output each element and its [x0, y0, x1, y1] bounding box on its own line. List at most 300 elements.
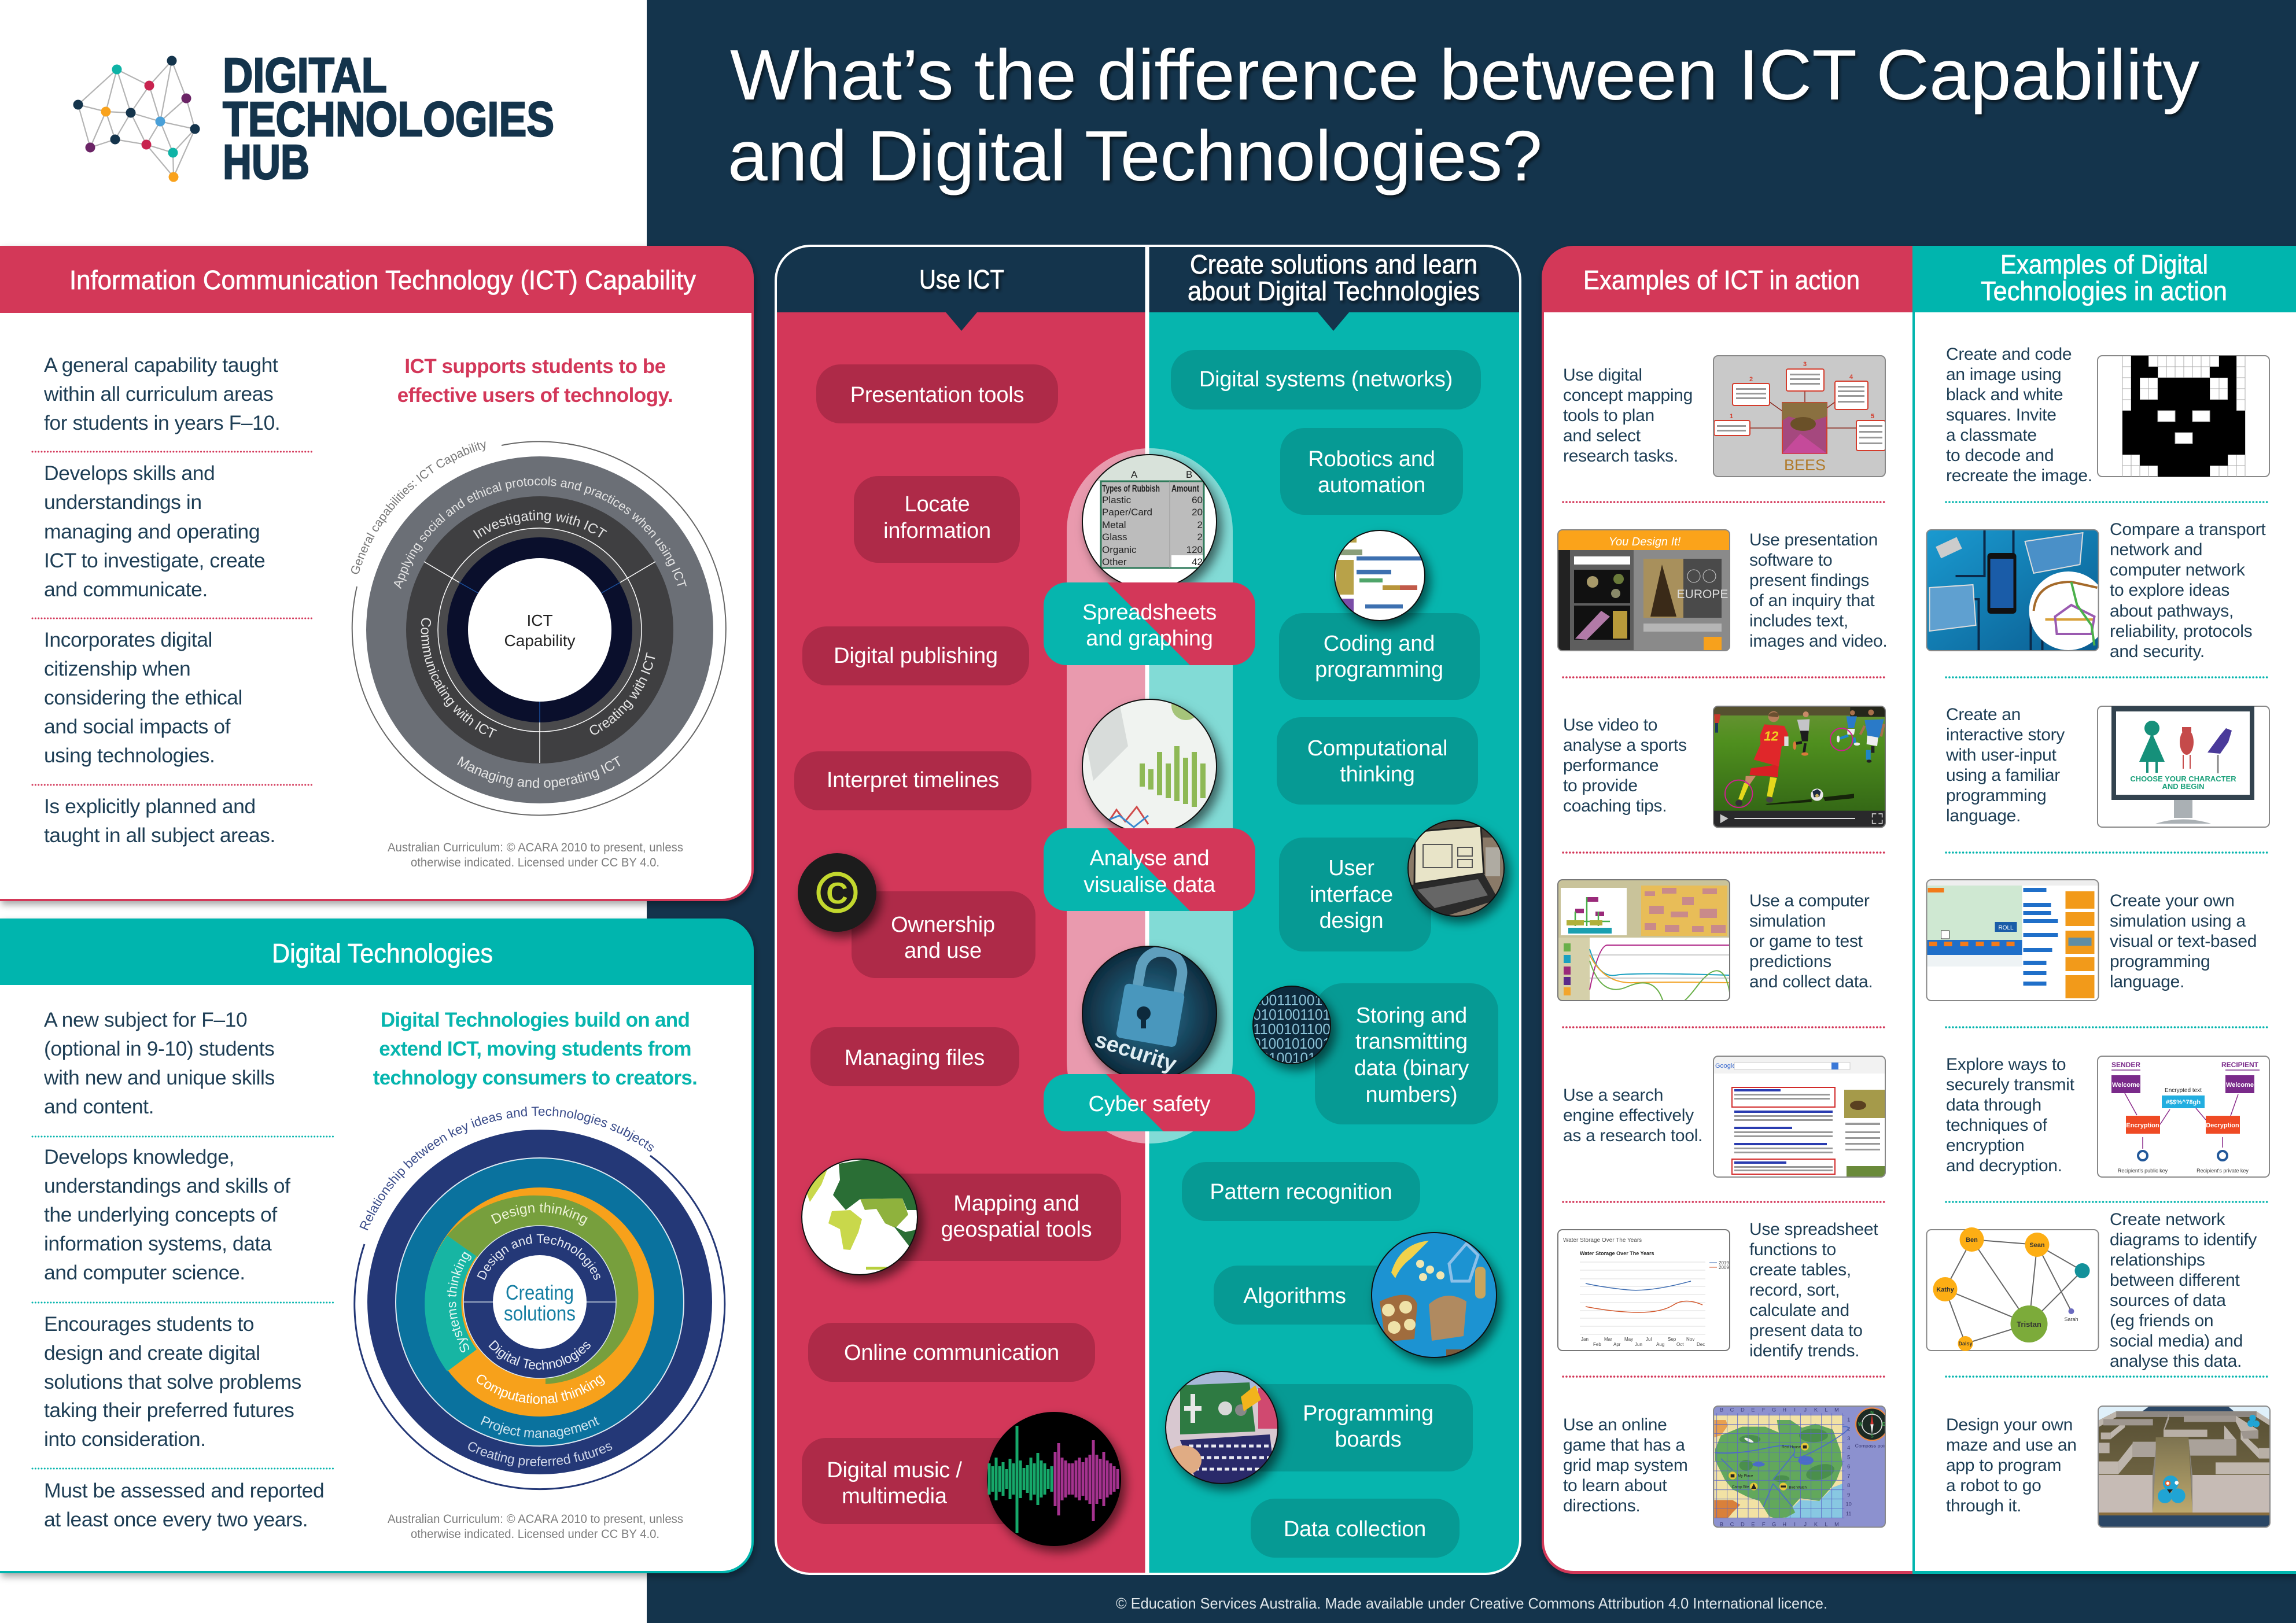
description points: Incorporates digital [44, 628, 212, 651]
text: grid map game: Use an online [1563, 1415, 1667, 1434]
image: water storage line chart: Apr [1613, 1342, 1621, 1347]
text: interactive story: language. [1946, 806, 2021, 825]
image: bee concept map: 1 [1730, 413, 1733, 420]
image: water storage line chart: Dec [1697, 1342, 1705, 1347]
pill: Coding and programming [1279, 613, 1480, 700]
text: own simulation [2110, 891, 2257, 991]
text: transport network: network and [2110, 540, 2202, 559]
image: water storage line chart: Jun [1635, 1342, 1642, 1347]
text: encryption [1946, 1055, 2075, 1175]
image: visual programming environment: ROLL [1998, 925, 2014, 931]
description points: Develops knowledge, [44, 1145, 234, 1168]
image: spreadsheet: Organic [1102, 544, 1137, 555]
image: grid map: 11 [1846, 1511, 1852, 1517]
text: encryption: securely transmit [1946, 1075, 2075, 1094]
text: grid map game: game that has a [1563, 1436, 1685, 1455]
chart: Digital Technologies rings [355, 1104, 725, 1489]
text: search engine: Use a search [1563, 1086, 1663, 1105]
image: grid map: Compass point [1855, 1443, 1889, 1448]
pill: Programming boards: Programming [1303, 1401, 1433, 1426]
image: grid map: F [1762, 1521, 1766, 1527]
heading: Create solutions [1188, 249, 1480, 306]
text: presentation software: Use presentation [1749, 530, 1878, 549]
teal statement: technology consumers to creators. [373, 1067, 697, 1089]
image: world map [802, 1159, 920, 1275]
image: presentation design tool: You Design It! [1609, 536, 1681, 548]
pill: Programming boards [1238, 1384, 1473, 1471]
image: monitor with characters: AND BEGIN [2162, 782, 2204, 791]
image: grid map: 10 [1845, 1502, 1852, 1507]
text: network diagrams [2110, 1210, 2257, 1371]
pill: Storing and transmitting data: transmitting [1355, 1030, 1468, 1054]
image: grid map: B [1720, 1407, 1723, 1413]
description points: information systems, data [44, 1232, 272, 1255]
pill: Pattern recognition [1182, 1162, 1420, 1221]
image: grid map: E [1751, 1407, 1755, 1413]
icon: copyright [798, 853, 876, 932]
teal statement: Digital Technologies build on and [381, 1009, 690, 1031]
pill: Ownership and use [852, 891, 1035, 978]
text: grid map game [1563, 1415, 1688, 1515]
image: grid map: D [1741, 1407, 1745, 1413]
text: search engine: engine effectively [1563, 1106, 1694, 1125]
panel background [0, 919, 754, 1573]
image: grid map: Rest House [1782, 1445, 1801, 1449]
description points: taking their preferred futures [44, 1399, 294, 1422]
text: transport network: and security. [2110, 642, 2205, 661]
image: grid map: F [1762, 1407, 1766, 1413]
image: grid map: C [1730, 1407, 1734, 1413]
pill: Mapping and geospatial tools: geospatial tools [941, 1218, 1092, 1242]
title: What’s the difference between ICT Capability [730, 36, 2200, 115]
description points: and communicate. [44, 578, 208, 601]
description points: Develops skills and [44, 462, 215, 485]
logo network icon [73, 56, 200, 182]
image: grid map: C [1730, 1521, 1734, 1527]
image: grid map: N [1870, 1410, 1874, 1415]
text: concept mapping [1563, 366, 1693, 466]
example row dividers [1563, 502, 2269, 1377]
text: encryption: techniques of [1946, 1116, 2048, 1135]
text: spreadsheet functions: identify trends. [1749, 1341, 1859, 1360]
text: network diagrams: analyse this data. [2110, 1352, 2242, 1371]
image: spreadsheet: Other [1102, 556, 1127, 567]
image: security padlock: security [1092, 1028, 1180, 1077]
panel: Digital Technologies [0, 919, 754, 1573]
text: spreadsheet functions: calculate and [1749, 1301, 1849, 1320]
image: grid map: E [1882, 1422, 1886, 1427]
text: interactive story: with user-input [1945, 746, 2057, 765]
image: water storage line chart: Sep [1668, 1337, 1676, 1342]
text: sports video [1563, 715, 1687, 816]
panel: Use ICT / Create solutions [776, 246, 1520, 1574]
image: water storage line chart: Feb [1593, 1342, 1601, 1347]
image: spreadsheet: Types of Rubbish [1102, 483, 1160, 494]
image: social network diagram: Ben [1966, 1237, 1978, 1244]
caption: otherwise indicated. Licensed under CC BY 4.0. [411, 1528, 659, 1541]
pill: User interface design: User [1328, 856, 1374, 880]
image: grid map: 3 [1847, 1436, 1850, 1441]
pill: Cyber safety: Cyber safety [1089, 1092, 1211, 1116]
text: encryption: Explore ways to [1946, 1055, 2066, 1074]
image: grid map: D [1741, 1521, 1745, 1527]
pill: Online communication: Online communication [844, 1341, 1059, 1365]
text: grid map game: to learn about [1563, 1476, 1667, 1495]
image: grid map: H [1782, 1521, 1786, 1527]
chart: ICT capability rings: Creating with ICT [590, 652, 655, 735]
image: grid map: K [1814, 1521, 1818, 1527]
logo wordmark [223, 48, 554, 189]
heading: Examples of Digital Technologies: Technologies in action [1981, 276, 2227, 306]
pill: Data collection: Data collection [1284, 1517, 1426, 1541]
chart: Digital Technologies rings: Digital Technologies [486, 1337, 594, 1373]
image: bee concept map: 5 [1871, 413, 1874, 420]
pill: Digital publishing: Digital publishing [834, 644, 998, 668]
description points: A new subject for F–10 [44, 1008, 247, 1031]
image: bee concept map: 4 [1849, 374, 1853, 381]
image: grid map: My Place [1738, 1474, 1753, 1478]
image: simulation [1558, 880, 1730, 1008]
panel: ICT Capability [0, 246, 754, 901]
image: water storage line chart: Nov [1686, 1337, 1694, 1342]
text: interactive story: using a familiar [1946, 766, 2060, 785]
image: water storage line chart: Water Storage Over The Years [1580, 1251, 1654, 1256]
red statement: ICT supports students to be [404, 355, 666, 378]
white left margin [0, 0, 647, 1623]
pill: Computational thinking: thinking [1340, 762, 1415, 787]
heading: Examples of Digital Technologies [1981, 249, 2227, 306]
description points: understandings and skills of [44, 1174, 290, 1197]
chart: Digital Technologies rings: Systems thinking [444, 1248, 473, 1356]
pill: Spreadsheets and graphing [1044, 582, 1255, 665]
pill: Digital systems [1171, 350, 1481, 410]
panel colour fields [776, 246, 1520, 1574]
panel heading: Digital Technologies [272, 938, 493, 968]
image: charts [1082, 691, 1217, 834]
image: spreadsheet: 60 [1192, 495, 1203, 506]
text: computer simulation: Use a computer [1749, 891, 1870, 910]
text: spreadsheet functions: functions to [1749, 1240, 1836, 1259]
text: network diagrams: sources of data [2110, 1291, 2226, 1310]
text: presentation software: images and video. [1749, 632, 1887, 651]
chart: ICT capability rings: ICT [526, 611, 553, 629]
caption [388, 1513, 683, 1541]
chart: ICT capability rings: Capability [504, 632, 575, 650]
heading: Create solutions: about Digital Technologies [1188, 276, 1480, 306]
image: binary digits: 0100101001 [1253, 1035, 1331, 1052]
text: code an image: to decode and [1946, 446, 2054, 465]
image: grid map: Bird Watch [1789, 1485, 1807, 1489]
image: monitor with characters: CHOOSE YOUR CHARACTER [2130, 774, 2236, 783]
image: binary digits: 0101001101 [1253, 1006, 1331, 1023]
description points: and computer science. [44, 1261, 245, 1284]
text: code an image: black and white [1946, 385, 2063, 404]
text: code an image: Create and code [1946, 345, 2072, 364]
chart: Digital Technologies rings: Computational thinking [473, 1371, 607, 1407]
image: spreadsheet: 42 [1192, 556, 1203, 567]
text: spreadsheet functions: present data to [1749, 1321, 1863, 1340]
description points: (optional in 9-10) students [44, 1037, 274, 1060]
image: spreadsheet: B [1186, 469, 1192, 480]
image: bee concept map: 2 [1749, 376, 1753, 383]
image: encryption diagram: RECIPIENT [2221, 1061, 2259, 1069]
text: interactive story: interactive story [1946, 725, 2065, 744]
text: robot maze: maze and use an [1946, 1436, 2077, 1455]
text: network diagrams: diagrams to identify [2110, 1230, 2257, 1249]
image: grid map: 1 [1847, 1417, 1850, 1422]
image: encryption diagram: Welcome [2226, 1082, 2254, 1089]
image: encryption diagram: Recipient's public key [2118, 1168, 2168, 1174]
pill: Analyse and visualise data [1044, 828, 1255, 911]
image: grid map: M [1834, 1407, 1839, 1413]
title [728, 36, 2200, 196]
image: grid map: S [1870, 1434, 1874, 1439]
text: transport network: reliability, protocols [2110, 622, 2252, 641]
text: presentation software: includes text, [1749, 611, 1848, 630]
image: audio waveform [987, 1412, 1121, 1546]
pill: Programming boards: boards [1335, 1427, 1401, 1452]
text: code an image [1946, 345, 2092, 485]
image: presentation design tool [1558, 530, 1730, 651]
pill: Data collection [1251, 1499, 1460, 1558]
text: network diagrams: (eg friends on [2110, 1311, 2213, 1330]
description points: Is explicitly planned and [44, 795, 256, 818]
text: concept mapping: research tasks. [1563, 447, 1678, 466]
image: grid map: L [1825, 1521, 1828, 1527]
pill: User interface design [1279, 838, 1431, 951]
chart: Digital Technologies rings: Design and Technologies [474, 1231, 606, 1282]
pill: Spreadsheets and graphing: and graphing [1086, 626, 1213, 651]
text: computer simulation [1749, 891, 1873, 991]
caption [388, 841, 683, 869]
title: and Digital Technologies? [728, 117, 1542, 196]
arrow: Create solutions [1318, 312, 1349, 331]
text: computer simulation: or game to test [1749, 932, 1863, 951]
image: encryption diagram: Welcome [2112, 1082, 2140, 1089]
image: water storage line chart: 2009 [1719, 1265, 1729, 1270]
description points: the underlying concepts of [44, 1203, 277, 1226]
description points: considering the ethical [44, 686, 242, 709]
text: code an image: a classmate [1946, 426, 2037, 445]
text: code an image: an image using [1946, 365, 2061, 384]
panel background [0, 246, 754, 901]
heading: Use ICT: Use ICT [919, 264, 1004, 294]
pill: Interpret timelines: Interpret timelines [827, 768, 999, 792]
text: network diagrams: between different [2110, 1271, 2240, 1290]
text: encryption: encryption [1946, 1136, 2024, 1155]
pill: Computational thinking: Computational [1307, 736, 1447, 761]
pill: Locate information: Locate [905, 492, 970, 517]
image: grid map: M [1834, 1521, 1839, 1527]
description points: for students in years F–10. [44, 411, 280, 434]
image: grid map: 2 [1847, 1426, 1850, 1432]
image: water storage line chart [1558, 1230, 1730, 1351]
image: spreadsheet: 120 [1186, 544, 1203, 555]
image: grid map: 5 [1847, 1454, 1850, 1460]
chart: ICT capability rings: Managing and operating ICT [457, 755, 620, 790]
panel heading: Information Communication Technology (ICT) Capability [69, 265, 696, 295]
text: concept mapping: Use digital [1563, 366, 1642, 385]
image: circuit and transport network [1926, 530, 2108, 651]
image: code blocks [1335, 530, 1425, 621]
text: computer simulation: simulation [1749, 912, 1826, 931]
pill: Analyse and visualise data: visualise data [1083, 873, 1216, 897]
image: social network diagram: Tristan [2017, 1320, 2041, 1329]
pill: Storing and transmitting data: numbers) [1366, 1083, 1457, 1107]
text: network diagrams: Create network [2110, 1210, 2226, 1229]
pill: Analyse and visualise data: Analyse and [1090, 846, 1209, 870]
image: grid map: 7 [1847, 1473, 1850, 1479]
pill: Ownership and use: and use [904, 939, 982, 963]
image: grid map: L [1825, 1407, 1828, 1413]
text: encryption: and decryption. [1946, 1156, 2062, 1175]
pill: Digital systems: Digital systems (networks) [1199, 367, 1453, 392]
image: bee concept map: 3 [1803, 361, 1807, 368]
image: encryption diagram: Recipient's private key [2197, 1168, 2249, 1174]
image: soccer video: 12 [1764, 728, 1779, 743]
image: water storage line chart: May [1624, 1337, 1633, 1342]
text: sports video: analyse a sports [1563, 736, 1687, 755]
image: binary digits [1253, 986, 1331, 1067]
pill: Mapping and geospatial tools [856, 1174, 1121, 1261]
image: search results [1713, 1056, 1885, 1177]
pill: Algorithms [1214, 1266, 1410, 1325]
description points: understandings in [44, 490, 202, 514]
pill: Storing and transmitting data [1315, 983, 1498, 1124]
panel: examples [1542, 246, 2296, 1574]
text: grid map game: grid map system [1563, 1456, 1688, 1475]
image: binary digits: 1001110010 [1253, 991, 1331, 1009]
text: interactive story [1945, 705, 2065, 825]
text: encryption: data through [1946, 1095, 2041, 1115]
chart: ICT capability rings: General capabilities: ICT Capability [348, 437, 488, 577]
image: bee concept map [1713, 356, 1885, 477]
pill: Coding and programming: Coding and [1324, 632, 1435, 656]
image: grid map: K [1814, 1407, 1818, 1413]
pill: User interface design: interface [1310, 883, 1393, 907]
text: presentation software: present findings [1749, 571, 1869, 590]
text: transport network: Compare a transport [2110, 520, 2266, 539]
text: code an image: squares. Invite [1946, 405, 2057, 425]
image: spreadsheet: 2 [1197, 532, 1203, 543]
image: grid map: B [1720, 1521, 1723, 1527]
text: robot maze: a robot to go [1946, 1476, 2041, 1495]
image: spreadsheet: 2 [1197, 519, 1203, 530]
arrow: Use ICT [946, 312, 977, 331]
description points: into consideration. [44, 1427, 206, 1451]
caption: Australian Curriculum: © ACARA 2010 to present, unless [388, 841, 683, 854]
pill: Spreadsheets and graphing: Spreadsheets [1082, 600, 1217, 625]
pill: Presentation tools: Presentation tools [850, 383, 1024, 407]
image: grid map: I [1794, 1407, 1796, 1413]
text: computer simulation: and collect data. [1749, 972, 1873, 991]
description points: managing and operating [44, 520, 260, 543]
image: social network diagram [1926, 1227, 2099, 1351]
image: binary digits: 1010010110 [1253, 1049, 1331, 1067]
pill: Cyber safety [1044, 1074, 1255, 1131]
image: grid map: J [1804, 1407, 1807, 1413]
image: grid map: I [1794, 1521, 1796, 1527]
pill: Storing and transmitting data: data (binary [1354, 1056, 1469, 1080]
heading: Examples of ICT: Examples of ICT in action [1583, 265, 1860, 295]
text: concept mapping: tools to plan [1563, 406, 1654, 425]
image: water storage line chart: Jul [1646, 1337, 1652, 1342]
image: spreadsheet [1082, 455, 1217, 589]
chart: ICT capability rings: Communicating with ICT [421, 618, 497, 738]
image: security padlock [1082, 946, 1217, 1080]
pill: Pattern recognition: Pattern recognition [1210, 1180, 1392, 1204]
heading: Create solutions: Create solutions and learn [1190, 249, 1477, 279]
image: grid map: 9 [1847, 1492, 1850, 1497]
text: presentation software: of an inquiry that [1749, 591, 1875, 610]
image: grid map: W [1858, 1422, 1863, 1427]
description points: Must be assessed and reported [44, 1479, 324, 1502]
image: social network diagram: Daisy [1958, 1341, 1973, 1347]
text: transport network: about pathways, [2110, 602, 2234, 621]
chart: Digital Technologies rings: Design thinking [489, 1200, 591, 1227]
image: soccer video [1713, 706, 1885, 828]
text: interactive story: Create an [1946, 705, 2021, 724]
image: spreadsheet: Metal [1102, 519, 1126, 530]
panel background [1542, 246, 2296, 1574]
text: transport network [2110, 520, 2266, 661]
text: grid map game: directions. [1563, 1496, 1640, 1515]
text: sports video: performance [1563, 756, 1659, 775]
image: food on chopping board [1372, 1233, 1498, 1358]
description points: Encourages students to [44, 1312, 254, 1336]
text: code an image: recreate the image. [1946, 466, 2092, 485]
text: own simulation: visual or text-based [2110, 932, 2257, 951]
image: water storage line chart: Oct [1676, 1342, 1684, 1347]
image: spreadsheet: Glass [1102, 532, 1127, 543]
text: sports video: to provide [1563, 776, 1638, 795]
image: presentation design tool: EUROPE [1677, 588, 1728, 601]
image: spreadsheet: A [1131, 469, 1138, 480]
chart: Digital Technologies rings: solutions [504, 1301, 576, 1325]
chart: Digital Technologies rings: Creating preferred futures [465, 1438, 614, 1469]
image: social network diagram: Sean [2029, 1242, 2045, 1249]
pill: Robotics and automation: automation [1318, 473, 1425, 497]
image: water storage line chart: Aug [1656, 1342, 1664, 1347]
pill: Interpret timelines [794, 751, 1031, 810]
text: network diagrams: relationships [2110, 1251, 2205, 1270]
teal statement: extend ICT, moving students from [379, 1038, 691, 1060]
caption: Australian Curriculum: © ACARA 2010 to present, unless [388, 1513, 683, 1526]
pill: Mapping and geospatial tools: Mapping and [953, 1192, 1079, 1216]
chart: Digital Technologies rings: Project management [478, 1413, 601, 1441]
image: laptop with user interface sketch [1408, 820, 1504, 920]
pill: Robotics and automation [1280, 428, 1463, 515]
image: visual programming environment [1926, 880, 2099, 1001]
pill: Online communication [808, 1323, 1095, 1382]
text: search engine: as a research tool. [1563, 1126, 1702, 1145]
image: water storage line chart: 2019 [1719, 1260, 1729, 1266]
text: spreadsheet functions: create tables, [1749, 1260, 1851, 1279]
image: encryption diagram [2098, 1056, 2269, 1177]
description points [32, 1008, 334, 1531]
text: own simulation: Create your own [2110, 891, 2235, 910]
description points: A general capability taught [44, 353, 278, 377]
image: robot in maze [2098, 1406, 2270, 1528]
description points: and content. [44, 1095, 154, 1118]
image: grid map: Camp Site [1732, 1485, 1749, 1489]
text: own simulation: simulation using a [2110, 912, 2246, 931]
text: spreadsheet functions: Use spreadsheet [1749, 1220, 1878, 1239]
chart: ICT capability rings: Investigating with ICT [473, 510, 607, 539]
image: encryption diagram: Decryption [2206, 1122, 2239, 1129]
text: transport network: computer network [2110, 560, 2246, 580]
description points: solutions that solve problems [44, 1370, 301, 1393]
